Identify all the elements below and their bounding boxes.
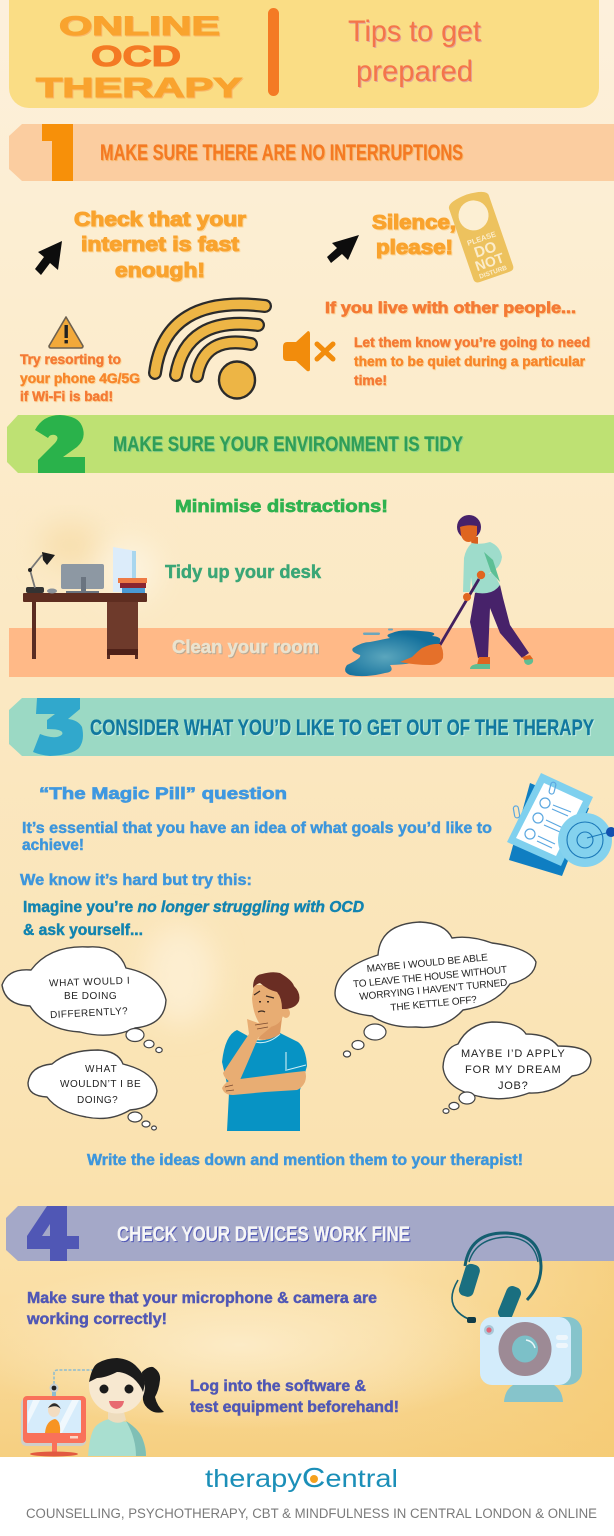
- text: silence please: [372, 212, 456, 259]
- subtitle: tips to get prepared: [348, 15, 482, 88]
- illustration: thinking man: [222, 972, 307, 1131]
- text: we know it's hard: We know it’s hard but try this:: [20, 872, 252, 889]
- text: magic pill question: “The Magic Pill” question: [39, 784, 287, 803]
- illustration: person mopping: [400, 515, 533, 669]
- text: let them know: time!: [354, 373, 387, 388]
- text: write ideas down: Write the ideas down and mention them to your therapist!: [87, 1152, 523, 1169]
- face features: [254, 991, 274, 1012]
- text: microphone and camera: Make sure that your microphone & camera are: [27, 1290, 377, 1307]
- ruler paper: [113, 547, 136, 592]
- face: [89, 1358, 145, 1414]
- head: [457, 515, 481, 542]
- text: check internet: internet is fast: [81, 234, 239, 256]
- target: [558, 813, 614, 867]
- header divider: [268, 8, 279, 96]
- number 1: [42, 124, 73, 181]
- body: [88, 1419, 146, 1456]
- neck: [470, 537, 478, 549]
- text: phone fallback tip: your phone 4G/5G: [20, 371, 140, 386]
- header panel: [9, 0, 599, 108]
- text: essential goals: [22, 820, 492, 854]
- text: log into the software: Log into the software &: [190, 1378, 366, 1395]
- stack of books: [118, 578, 147, 593]
- sweater shadow: [484, 552, 500, 582]
- thought bubble: dream job: [443, 1022, 591, 1113]
- section 4 banner: [6, 1206, 614, 1261]
- thought bubble: what would I be doing: WHAT WOULD I: [49, 976, 130, 989]
- neck: [108, 1412, 126, 1423]
- icon: do not disturb door hanger: [447, 188, 515, 284]
- thought bubble: leave the house: [335, 922, 536, 1057]
- heading: section 2: MAKE SURE YOUR ENVIRONMENT IS TIDY: [113, 433, 463, 456]
- section 3 banner: [9, 698, 614, 756]
- icon: do not disturb door hanger: NOT: [473, 249, 506, 274]
- title: Online OCD Therapy: ONLINE: [59, 11, 220, 41]
- subtitle: tips to get prepared: prepared: [356, 55, 473, 88]
- folded forearm and hand: [222, 1071, 306, 1095]
- title: Online OCD Therapy: THERAPY: [36, 72, 242, 103]
- shoes: [470, 655, 533, 669]
- text: imagine and ask yourself: Imagine you’re no longer struggling with OCD: [23, 899, 364, 916]
- text: essential goals: It’s essential that you have an idea of what goals you’d like to: [22, 820, 492, 837]
- hair: [89, 1358, 145, 1392]
- text: log into the software: test equipment beforehand!: [190, 1399, 399, 1416]
- text: check internet: Check that your: [74, 209, 246, 231]
- icon: do not disturb door hanger: PLEASE: [466, 229, 497, 248]
- thought bubble: what would I be doing: BE DOING: [64, 991, 117, 1002]
- body shading: [126, 1421, 146, 1456]
- section 2 banner: [7, 415, 614, 473]
- sweater: [463, 542, 502, 593]
- text: live with others: If you live with other people...: [325, 300, 576, 317]
- thought bubble: leave the house: TO LEAVE THE HOUSE WITHOUT: [353, 965, 508, 990]
- thought bubble: dream job: FOR MY DREAM: [465, 1064, 561, 1076]
- hair: [253, 972, 299, 1009]
- number 3: [33, 698, 83, 756]
- text: microphone and camera: [26, 1290, 377, 1328]
- thought bubble: what wouldn't I be doing: WOULDN’T I BE: [60, 1079, 141, 1090]
- hands: [463, 571, 485, 601]
- collar and sleeve lines: [255, 1034, 306, 1071]
- icon: do not disturb door hanger: DISTURB: [478, 265, 508, 281]
- neck: [258, 1018, 282, 1040]
- text: clean your room: Clean your room: [172, 637, 319, 657]
- raised arm and hand: [223, 1019, 271, 1082]
- title: Online OCD Therapy: OCD: [91, 41, 181, 73]
- icon: checklist and target: [507, 773, 614, 876]
- mouse: [47, 588, 57, 594]
- thought bubble: what would I be doing: [2, 947, 166, 1053]
- ear: [282, 1008, 290, 1018]
- thought bubble: what wouldn't I be doing: DOING?: [77, 1095, 118, 1106]
- thought bubble: leave the house: THE KETTLE OFF?: [390, 995, 478, 1014]
- eyes: [100, 1384, 134, 1394]
- text: tidy up your desk: Tidy up your desk: [165, 562, 322, 582]
- thought bubble: what wouldn't I be doing: WHAT: [85, 1064, 117, 1075]
- finger lines: [225, 1023, 268, 1091]
- thought bubble: what wouldn't I be doing: [28, 1050, 157, 1130]
- illustration: video call with girl: [21, 1358, 164, 1456]
- thought bubble: dream job: JOB?: [498, 1080, 528, 1092]
- icon: wifi signal: [155, 304, 265, 398]
- thought bubble: leave the house: WORRYING I HAVEN’T TURNED: [359, 978, 508, 1003]
- shirt: [222, 1030, 307, 1131]
- text: let them know: them to be quiet during a particular: [354, 354, 586, 369]
- floor strip: [9, 628, 614, 677]
- icon: cursor arrow right: [327, 235, 359, 263]
- monitor: [61, 564, 104, 593]
- text: log into the software: [190, 1378, 399, 1416]
- thought bubble: what would I be doing: DIFFERENTLY?: [50, 1006, 128, 1021]
- strapline: COUNSELLING, PSYCHOTHERAPY, CBT & MINDFULNESS IN CENTRAL LONDON & ONLINE: [26, 1506, 597, 1521]
- section 1 banner: [9, 124, 614, 181]
- number 2: [35, 415, 85, 473]
- heading: section 1: MAKE SURE THERE ARE NO INTERRUPTIONS: [100, 140, 463, 165]
- thought bubble: leave the house: MAYBE I WOULD BE ABLE: [366, 952, 489, 975]
- dotted cable: [54, 1370, 93, 1384]
- head: [252, 985, 288, 1027]
- text: check internet: [74, 209, 246, 282]
- ponytail: [142, 1367, 164, 1413]
- trousers: [470, 585, 529, 658]
- monitor: [21, 1396, 86, 1456]
- subtitle: tips to get prepared: Tips to get: [348, 15, 482, 48]
- icon: webcam: [480, 1317, 582, 1402]
- text: silence please: Silence,: [372, 212, 456, 234]
- title: Online OCD Therapy: [36, 11, 242, 103]
- icon: headset: [452, 1233, 541, 1323]
- heading: section 4: CHECK YOUR DEVICES WORK FINE: [117, 1223, 410, 1246]
- text: imagine and ask yourself: [23, 899, 364, 939]
- mop: [400, 579, 479, 665]
- text: minimise distractions: Minimise distractions!: [175, 496, 388, 516]
- text: check internet: enough!: [115, 260, 205, 282]
- desk lamp: [26, 552, 55, 593]
- text: let them know: [354, 335, 590, 388]
- icon: warning triangle: [49, 317, 83, 348]
- thought bubble: dream job: MAYBE I’D APPLY: [461, 1048, 565, 1060]
- text: silence please: please!: [376, 237, 453, 259]
- logo: therapy central: therapy Central: [205, 1462, 398, 1493]
- illustration: desk with computer: [23, 547, 147, 659]
- icon: do not disturb door hanger: DO: [472, 238, 499, 262]
- footer panel: [0, 1457, 614, 1536]
- text: imagine and ask yourself: & ask yourself...: [23, 922, 143, 939]
- icon: muted speaker: [283, 331, 333, 371]
- text: let them know: Let them know you’re going to need: [354, 335, 590, 350]
- text: phone fallback tip: Try resorting to: [20, 352, 121, 367]
- text: essential goals: achieve!: [22, 837, 84, 854]
- illustration: puddle: [345, 628, 440, 676]
- icon: cursor arrow left: [35, 241, 62, 275]
- text: phone fallback tip: [20, 352, 140, 404]
- text: phone fallback tip: if Wi-Fi is bad!: [20, 389, 113, 404]
- text: microphone and camera: working correctly!: [26, 1311, 167, 1328]
- mouth: [109, 1401, 124, 1409]
- webcam on monitor: [50, 1384, 58, 1396]
- number 4: [27, 1206, 79, 1261]
